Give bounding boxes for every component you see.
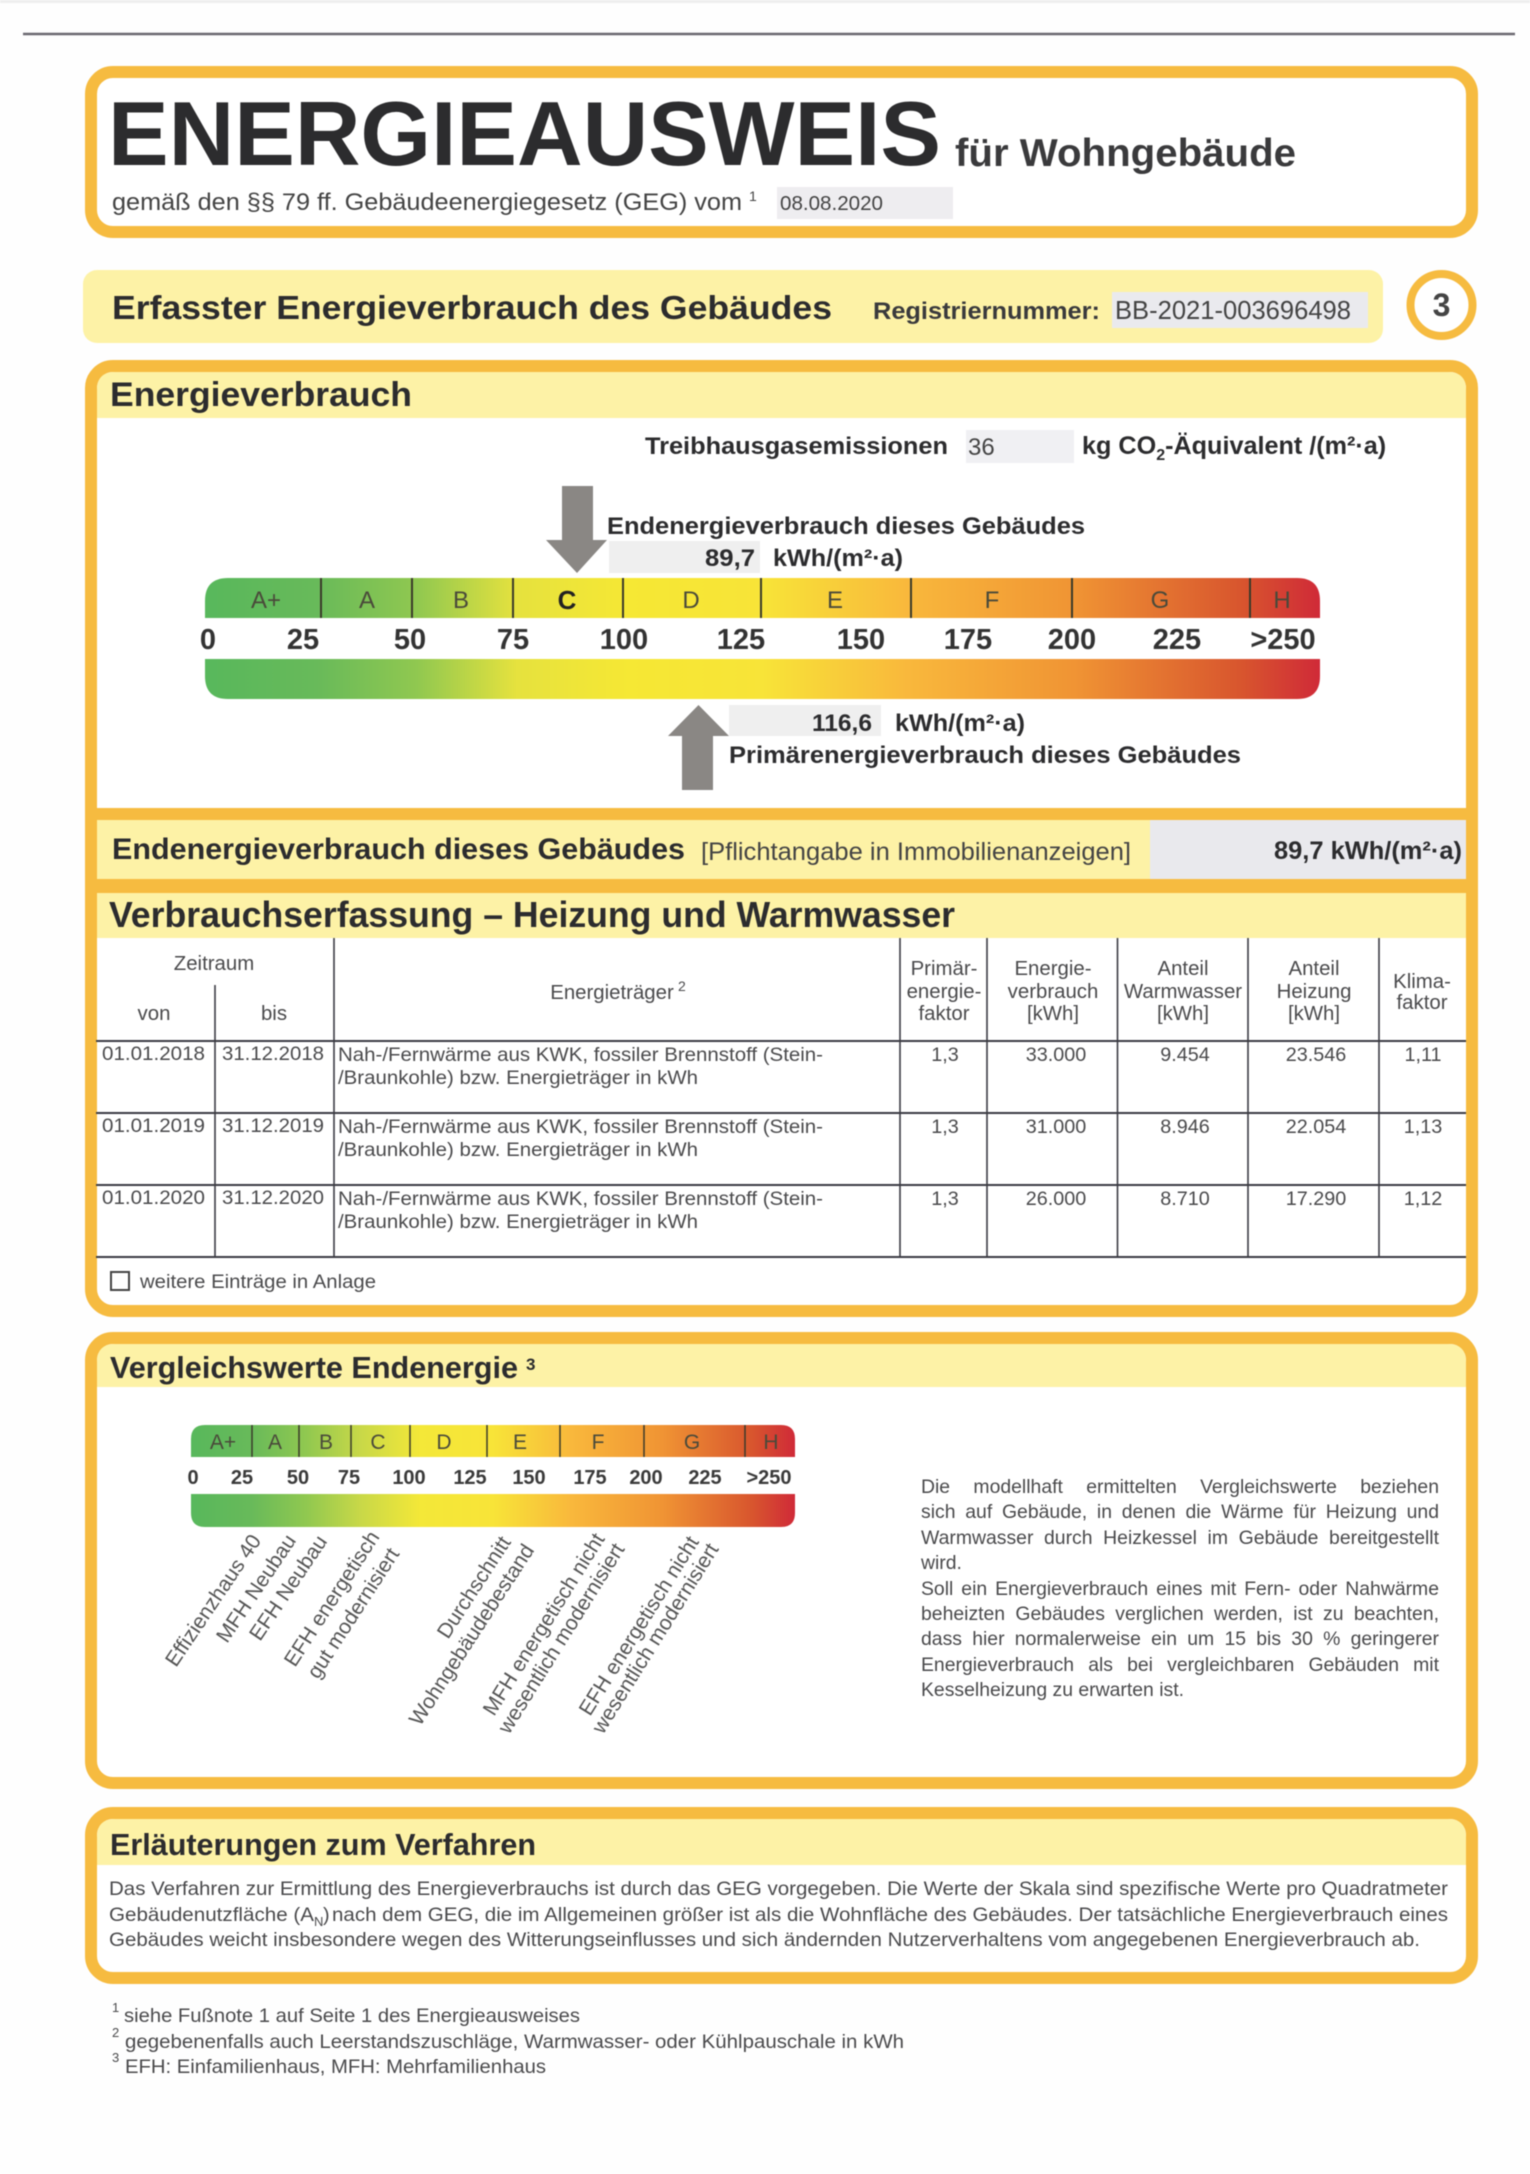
rotated building type labels: Wohngebäudebestand [405,1540,539,1730]
efficiency scale: classes: A [359,587,375,614]
small scale: gradient bar [191,1494,795,1527]
table header: Primär- [911,958,977,980]
greenhouse gas emissions: kg CO [1082,432,1156,460]
registration number field: BB-2021-003696498 [1115,295,1351,325]
small scale: numbers: 100 [392,1467,426,1489]
heading: Energieverbrauch: Energieverbrauch [110,376,412,414]
banner: section heading and registration number [83,270,1383,343]
heading: consumption record: Verbrauchserfassung – Heizung und Warmwasser [109,894,955,935]
footnotes: siehe Fußnote 1 auf Seite 1 des Energieausweises [124,2005,580,2027]
table header: faktor [918,1003,970,1025]
small scale: numbers: 200 [629,1467,663,1489]
table row 2019 [102,1115,1442,1161]
explanatory paragraph: beheizten Gebäudes verglichen werden, ist zu beachten, [921,1603,1439,1625]
efficiency scale: classes: G [1151,587,1169,614]
heading: explanation: Erläuterungen zum Verfahren [110,1827,536,1862]
rotated building type labels: wesentlich modernisiert [587,1539,724,1738]
heading: Energieausweis: ENERGIEAUSWEIS [108,84,941,185]
table header: Klima- [1393,971,1451,993]
small scale: numbers: 125 [453,1467,487,1489]
small scale: numbers: 150 [512,1467,546,1489]
table row 2019: 8.946 [1160,1116,1210,1138]
table row 2018: 9.454 [1160,1044,1210,1066]
final energy label: Endenergieverbrauch dieses Gebäudes [607,513,1085,540]
table header: faktor [1396,992,1448,1014]
table header: energie- [907,981,981,1003]
table header: [kWh] [1157,1003,1209,1025]
panel: explanation of procedure [91,1813,1472,1978]
table row 2020: 01.01.2020 [102,1187,205,1209]
efficiency scale: numbers: 0 [200,624,216,656]
heading: consumption record [97,893,1466,938]
table row 2019: 1,3 [931,1116,959,1138]
efficiency scale: classes: A+ [251,587,281,614]
final energy summary strip: 89,7 kWh/(m²·a) [1274,837,1462,865]
subheading: für Wohngebäude: für Wohngebäude [955,132,1296,175]
table row 2020: 31.12.2020 [222,1187,324,1209]
greenhouse gas emissions [645,430,1386,464]
primary energy label: kWh/(m²·a) [895,710,1025,737]
explanation text: nach dem GEG, die im Allgemeinen größer ist als die Wohnfläche des Gebäudes. Der tatsächliche Energieverbrauch eines [332,1904,1448,1926]
efficiency scale: numbers: 225 [1153,624,1201,656]
table header: Energieträger [550,982,674,1004]
efficiency scale: numbers: 50 [394,624,426,656]
legal basis line: gemäß den §§ 79 ff. Gebäudeenergiegesetz (GEG) vom [112,189,742,216]
table header: Anteil [1157,958,1209,980]
explanation text [109,1878,1448,1951]
heading: comparison values: 3 [526,1355,535,1374]
table row 2018: 31.12.2018 [222,1043,324,1065]
greenhouse gas emissions: -Äquivalent /(m²·a) [1165,432,1386,460]
table row 2019: /Braunkohle) bzw. Energieträger in kWh [338,1139,698,1161]
small scale: classes [191,1425,795,1457]
efficiency scale: numbers: 150 [837,624,885,656]
efficiency scale: numbers: 25 [287,624,319,656]
table row 2020: 1,3 [931,1188,959,1210]
final energy label [607,513,1085,573]
small scale: numbers: >250 [746,1467,792,1489]
table row 2019: 1,13 [1404,1116,1442,1138]
small scale: numbers: 225 [688,1467,722,1489]
explanation text: Das Verfahren zur Ermittlung des Energieverbrauchs ist durch das GEG vorgegeben. Die Werte der Skala sind spezifische Werte pro Quadratmeter [109,1878,1448,1900]
rotated building type labels: EFH energetisch [280,1527,384,1671]
explanatory paragraph: Energieverbrauch als bei vergleichbaren Gebäuden mit [921,1654,1439,1676]
small scale: numbers: 75 [338,1467,360,1489]
date field [777,187,953,219]
panel: comparison values [91,1338,1472,1783]
table row 2019: 22.054 [1286,1116,1346,1138]
explanation text: ) [323,1904,330,1926]
final energy label: 89,7 [705,545,755,572]
small scale: classes: C [370,1431,386,1454]
efficiency scale: numbers: 100 [600,624,648,656]
efficiency scale: numbers: >250 [1250,624,1316,656]
banner heading: Erfasster Energieverbrauch des Gebäudes [112,289,832,326]
rotated building type labels: MFH Neubau [212,1530,301,1647]
footnotes: EFH: Einfamilienhaus, MFH: Mehrfamilienhaus [125,2056,546,2078]
greenhouse gas emissions: 2 [1156,447,1165,464]
small scale: classes: D [436,1431,452,1454]
explanation text: Gebäudenutzfläche (A [109,1904,315,1926]
table row 2018: 33.000 [1026,1044,1086,1066]
efficiency scale: numbers: 175 [944,624,992,656]
efficiency scale: classes: B [453,587,469,614]
efficiency scale: gradient bar [205,659,1320,699]
explanatory paragraph: Kesselheizung zu erwarten ist. [921,1679,1184,1701]
efficiency scale: numbers [200,624,1316,656]
table header: 2 [678,978,686,994]
table header: Energie- [1014,958,1092,980]
footnotes: 1 [112,2000,119,2015]
footnotes: gegebenenfalls auch Leerstandszuschläge, Warmwasser- oder Kühlpauschale in kWh [125,2031,904,2053]
rotated building type labels [161,1527,724,1738]
table header: [kWh] [1027,1003,1079,1025]
table header: [kWh] [1288,1003,1340,1025]
table header: Heizung [1277,981,1351,1003]
table row 2020: /Braunkohle) bzw. Energieträger in kWh [338,1211,698,1233]
table row 2020: 8.710 [1160,1188,1210,1210]
arrow: primary energy marker [668,705,729,790]
efficiency scale: classes: C [558,585,577,615]
efficiency scale: numbers: 200 [1048,624,1096,656]
explanatory paragraph [921,1475,1441,1715]
date field: 08.08.2020 [780,193,883,215]
efficiency scale: classes: H [1273,587,1291,614]
small scale: numbers [187,1467,792,1489]
table header [138,953,1451,1025]
greenhouse gas emissions: Treibhausgasemissionen [645,433,948,460]
table row 2018: /Braunkohle) bzw. Energieträger in kWh [338,1067,698,1089]
final energy label: kWh/(m²·a) [773,545,903,572]
table header: Anteil [1288,958,1340,980]
table header: Zeitraum [174,953,254,975]
footnotes: 3 [112,2050,119,2065]
table row 2018: 01.01.2018 [102,1043,205,1065]
small scale: numbers: 0 [187,1467,199,1489]
table row 2018: 23.546 [1286,1044,1346,1066]
table row 2019: Nah-/Fernwärme aus KWK, fossiler Brennstoff (Stein- [338,1116,823,1138]
table header: von [138,1003,170,1025]
explanation text: Gebäudes weicht insbesondere wegen des Witterungseinflusses und sich ändernden Nutzerverhaltens vom angegebenen Energieverbrauch ab. [109,1929,1420,1951]
explanation text: N [314,1914,323,1929]
rotated building type labels: EFH Neubau [245,1531,332,1645]
rotated building type labels: gut modernisiert [303,1544,404,1683]
explanatory paragraph: wird. [921,1552,962,1574]
explanatory paragraph: dass hier normalerweise ein um 15 bis 30 % geringerer [921,1628,1439,1650]
table row 2020: Nah-/Fernwärme aus KWK, fossiler Brennstoff (Stein- [338,1188,823,1210]
table header: bis [261,1003,287,1025]
rotated building type labels: MFH energetisch nicht [479,1529,610,1720]
table row 2019: 01.01.2019 [102,1115,205,1137]
final energy summary strip: [Pflichtangabe in Immobilienanzeigen] [701,838,1131,866]
registration label: Registriernummer: [873,298,1100,325]
footnotes: 2 [112,2025,119,2040]
small scale: classes: A [268,1431,282,1454]
rotated building type labels: EFH energetisch nicht [575,1532,704,1720]
small scale: classes: A+ [210,1431,236,1454]
table row 2019: 31.12.2019 [222,1115,324,1137]
checkbox: further entries: weitere Einträge in Anlage [139,1271,376,1293]
efficiency scale: numbers: 125 [717,624,765,656]
panel: title [91,72,1472,232]
efficiency scale: classes: E [827,587,843,614]
table row 2018: Nah-/Fernwärme aus KWK, fossiler Brennstoff (Stein- [338,1044,823,1066]
explanatory paragraph: sich auf Gebäude, in denen die Wärme für Heizung und [921,1501,1439,1523]
page number badge: 3 [1433,287,1450,323]
rotated building type labels: wesentlich modernisiert [493,1539,630,1738]
table row 2018: 1,11 [1404,1044,1442,1066]
small scale: numbers: 25 [231,1467,253,1489]
efficiency scale: classes [205,578,1320,618]
primary energy label: 116,6 [812,710,872,737]
table row 2020: 1,12 [1404,1188,1442,1210]
explanatory paragraph: Die modellhaft ermittelten Vergleichswerte beziehen [921,1476,1439,1498]
small scale: classes: E [513,1431,527,1454]
panel: energy consumption [85,366,1478,1311]
rotated building type labels: Durchschnitt [433,1532,516,1643]
small scale: classes: B [319,1431,333,1454]
explanatory paragraph: Warmwasser durch Heizkessel im Gebäude bereitgestellt [921,1527,1439,1549]
efficiency scale: classes: D [682,587,700,614]
explanatory paragraph: Soll ein Energieverbrauch eines mit Fern- oder Nahwärme [921,1578,1439,1600]
table row 2018 [102,1043,1442,1089]
table row 2020 [102,1187,1442,1233]
small scale: classes: F [592,1431,604,1454]
arrow: final energy marker [546,486,607,573]
table row 2019: 31.000 [1026,1116,1086,1138]
consumption table [96,938,1466,1257]
small scale: numbers: 50 [287,1467,309,1489]
page number badge [1410,274,1472,336]
primary energy label [729,705,1241,769]
table header: Warmwasser [1124,981,1242,1003]
small scale: numbers: 175 [573,1467,607,1489]
small scale: classes: H [763,1431,779,1454]
heading: comparison values: Vergleichswerte Endenergie [110,1350,518,1385]
panel: title: 1 [749,188,757,204]
table row 2020: 26.000 [1026,1188,1086,1210]
primary energy label: Primärenergieverbrauch dieses Gebäudes [729,742,1241,769]
table header: verbrauch [1008,981,1098,1003]
efficiency scale: numbers: 75 [497,624,529,656]
table row 2018: 1,3 [931,1044,959,1066]
greenhouse gas emissions: 36 [968,434,995,461]
small scale: classes: G [684,1431,700,1454]
final energy summary strip [97,820,1466,879]
efficiency scale: classes: F [985,587,999,614]
rotated building type labels: Effizienzhaus 40 [161,1530,266,1671]
table row 2020: 17.290 [1286,1188,1346,1210]
footnotes [112,2000,904,2078]
final energy summary strip: Endenergieverbrauch dieses Gebäudes [112,833,685,866]
